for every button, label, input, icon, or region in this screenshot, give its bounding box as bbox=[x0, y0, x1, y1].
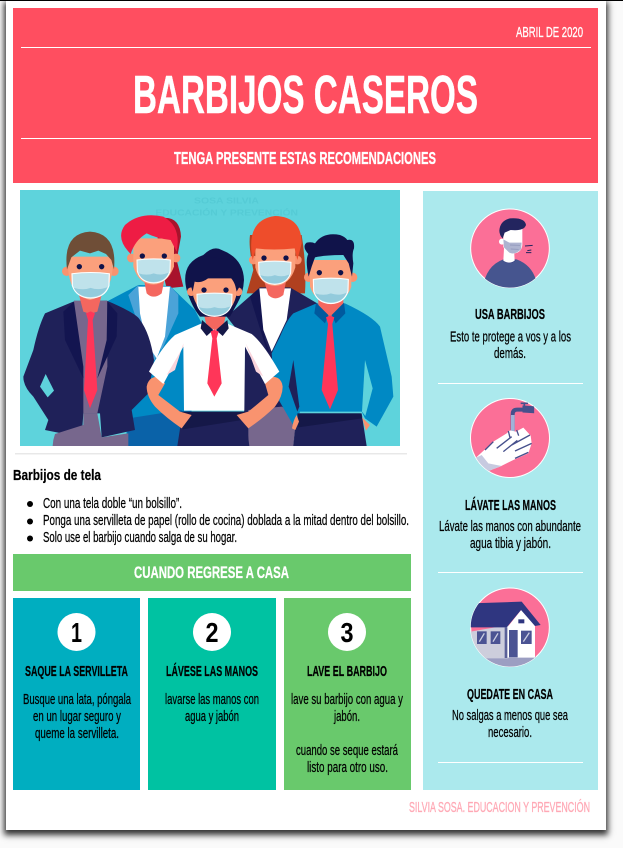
watermark bbox=[156, 198, 297, 216]
sidebar panel bbox=[423, 191, 598, 790]
section banner bbox=[13, 554, 411, 591]
divider under illustration bbox=[15, 453, 407, 454]
step card 1: queme la servilleta. bbox=[35, 726, 119, 742]
step card 1: Busque una lata, póngala bbox=[23, 692, 132, 708]
bullet list bbox=[27, 496, 409, 546]
step card 3: 3 bbox=[340, 617, 354, 648]
step card 3: LAVE EL BARBIJO bbox=[307, 664, 387, 680]
woman with orange hair bbox=[227, 216, 318, 446]
subheading: cloth masks: Barbijos de tela bbox=[13, 467, 102, 484]
woman with red hair bbox=[107, 215, 203, 446]
text: stay home: QUEDATE EN CASA bbox=[467, 687, 553, 703]
step card 3: jabón. bbox=[333, 709, 360, 725]
watermark: EDUCACIÓN Y PREVENCIÓN bbox=[155, 206, 298, 217]
subtitle: TENGA PRESENTE ESTAS RECOMENDACIONES bbox=[174, 148, 436, 168]
step card 3: cuando se seque estará bbox=[296, 743, 399, 759]
watermark: SOSA SILVIA bbox=[194, 195, 259, 205]
bullet list: Con una tela doble “un bolsillo”. bbox=[43, 496, 182, 512]
text: use masks bbox=[450, 307, 571, 362]
icon: washing hands bbox=[470, 398, 550, 478]
step card 1: en un lugar seguro y bbox=[33, 709, 121, 725]
header banner bbox=[13, 8, 598, 183]
text: use masks: demás. bbox=[494, 346, 526, 362]
step card 2 bbox=[148, 598, 276, 790]
step card 2: LÁVESE LAS MANOS bbox=[166, 663, 258, 680]
step card 1 bbox=[13, 598, 140, 790]
bullet list: Ponga una servilleta de papel (rollo de cocina) doblada a la mitad dentro del bolsillo. bbox=[43, 513, 409, 529]
step card 1: 1 bbox=[71, 617, 82, 648]
icon: house bbox=[470, 588, 550, 670]
illustration: five people wearing masks bbox=[20, 190, 400, 446]
text: use masks: USA BARBIJOS bbox=[475, 307, 545, 323]
bullet list: Solo use el barbijo cuando salga de su hogar. bbox=[43, 530, 237, 546]
tie bbox=[84, 311, 97, 408]
step card 1: SAQUE LA SERVILLETA bbox=[25, 664, 128, 680]
man on the left in dark suit bbox=[23, 232, 154, 446]
step card 3: lave su barbijo con agua y bbox=[291, 692, 403, 708]
text: stay home: necesario. bbox=[488, 725, 532, 741]
step card 2: 2 bbox=[206, 617, 218, 648]
section banner: CUANDO REGRESE A CASA bbox=[134, 563, 289, 582]
step card 2: agua y jabón bbox=[185, 709, 239, 725]
text: stay home bbox=[452, 687, 569, 741]
icon: man wearing mask bbox=[471, 209, 549, 290]
man on the right in blue shirt bbox=[272, 234, 393, 446]
text: wash hands: agua tibia y jabón. bbox=[470, 536, 551, 552]
text: wash hands: LÁVATE LAS MANOS bbox=[465, 497, 556, 514]
step card 3: listo para otro uso. bbox=[307, 760, 388, 776]
step card 2: lavarse las manos con bbox=[165, 692, 259, 708]
date: ABRIL DE 2020 bbox=[516, 24, 583, 41]
woman in the centre in white shirt bbox=[147, 248, 283, 446]
step card 3 bbox=[284, 598, 411, 790]
text: wash hands bbox=[439, 497, 581, 552]
